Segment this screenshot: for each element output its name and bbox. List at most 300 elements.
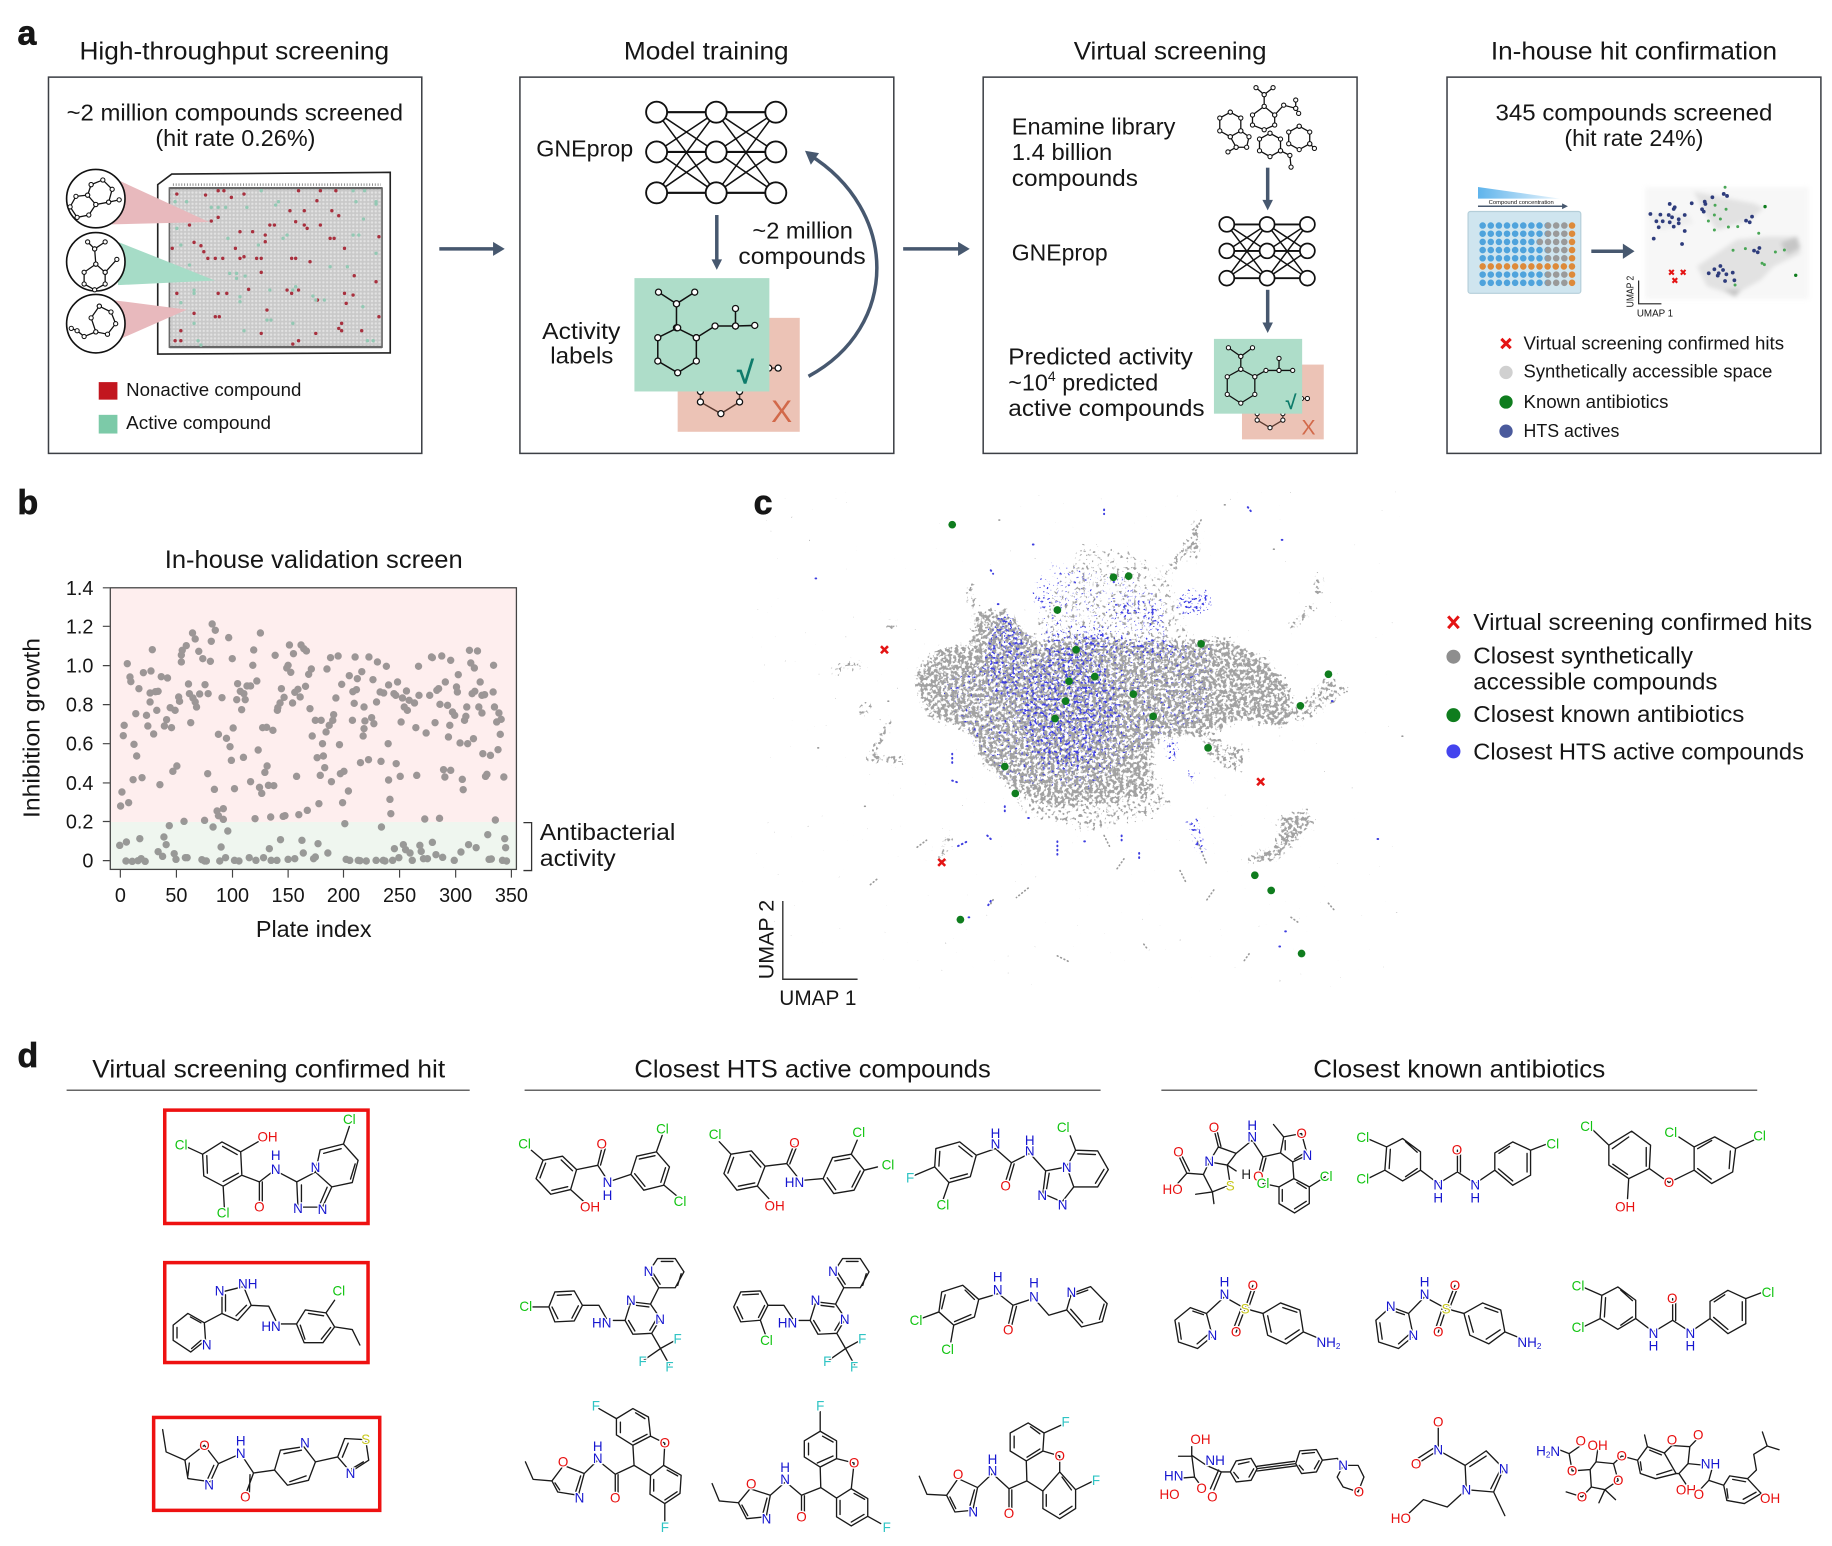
antibiotic 8: N <box>1461 1482 1471 1497</box>
hit box 1: Cl <box>217 1205 230 1220</box>
legend: Nonactive compound <box>126 379 301 400</box>
antibiotic 1: Cl <box>1320 1169 1332 1184</box>
molecule 6: Cl <box>910 1313 922 1328</box>
panel: model training <box>520 39 894 453</box>
y axis tick labels: 0.8 <box>66 695 93 717</box>
x axis title: Plate index <box>256 916 372 942</box>
UMAP axes <box>755 900 858 1010</box>
antibiotic 2: Cl <box>1356 1130 1369 1145</box>
antibiotic 4: NH <box>1316 1335 1336 1350</box>
antibiotic 8: HO <box>1391 1511 1411 1526</box>
molecule 3: Cl <box>1057 1120 1070 1135</box>
molecule 3: N <box>1025 1144 1035 1159</box>
panel: closest HTS active compounds <box>518 1056 1108 1535</box>
molecule 6: N <box>1029 1290 1039 1305</box>
blue HTS active compounds <box>816 507 1379 947</box>
molecule 3: H <box>1025 1133 1035 1148</box>
legend: Active compound <box>126 412 271 433</box>
legend: Synthetically accessible space <box>1524 361 1772 381</box>
hit box 3: N <box>300 1436 310 1451</box>
x axis tick labels <box>115 885 528 907</box>
hit box 2: HN <box>261 1319 281 1334</box>
antibiotic 5: O <box>1450 1278 1460 1293</box>
UMAP axes: UMAP 2 <box>755 900 778 979</box>
arrow down 2 <box>1262 290 1273 333</box>
x axis tick labels: 100 <box>216 885 249 907</box>
summary text: 345 compounds screened <box>1496 99 1772 125</box>
x axis tick labels: 250 <box>383 885 416 907</box>
antibiotic 7: O <box>1354 1485 1364 1500</box>
hit box 3: O <box>240 1489 251 1504</box>
molecule 8: O <box>746 1477 756 1492</box>
curved feedback arrow <box>805 151 877 376</box>
molecule 7: H <box>593 1439 603 1454</box>
molecule 2: O <box>789 1135 800 1150</box>
antibiotic 2 <box>1356 1130 1559 1205</box>
molecule 6: N <box>1067 1285 1076 1300</box>
antibiotic 9: NH <box>1701 1457 1720 1472</box>
text: predicted activity: 4 <box>1048 368 1056 384</box>
panel label a: a <box>18 14 38 52</box>
gray compound cloud <box>818 505 1404 962</box>
heading: in-house hit confirmation: In-house hit confirmation <box>1491 39 1777 66</box>
molecule 2: OH <box>765 1198 785 1213</box>
molecule 2: Cl <box>852 1125 865 1140</box>
hit box 2: Cl <box>332 1284 345 1299</box>
molecule 6: N <box>993 1283 1003 1298</box>
active card: √ <box>1286 392 1297 414</box>
hit box 1: N <box>271 1162 281 1177</box>
hit box 2: N <box>215 1284 225 1299</box>
antibiotic 9: O <box>1576 1433 1586 1448</box>
antibiotic 1: HO <box>1163 1182 1183 1197</box>
text: predicted activity: active compounds <box>1008 395 1205 421</box>
legend: Closest known antibiotics <box>1473 701 1744 727</box>
molecule 7: F <box>661 1520 669 1535</box>
molecule 9: F <box>1092 1473 1100 1488</box>
library molecules <box>1220 88 1314 167</box>
antibiotic 4: O <box>1248 1278 1258 1293</box>
molecule 3: N <box>1058 1197 1067 1212</box>
molecule 5: HN <box>778 1315 797 1330</box>
antibiotic 1: N <box>1303 1148 1312 1163</box>
text: predicted activity: Predicted activity <box>1008 344 1193 370</box>
text: Enamine library <box>1012 113 1176 191</box>
molecule 7 <box>525 1398 681 1535</box>
molecule 3: Cl <box>937 1197 949 1212</box>
antibiotic 7: NH <box>1205 1453 1225 1468</box>
molecule 5: N <box>828 1264 838 1279</box>
antibiotic 6: H <box>1686 1339 1695 1354</box>
arrow: screening to training <box>439 242 505 256</box>
small UMAP axes: UMAP 1 <box>1637 308 1673 320</box>
text: predicted activity: predicted <box>1056 369 1158 395</box>
molecule 4: HN <box>592 1315 611 1330</box>
antibiotic 1: O <box>1253 1169 1264 1184</box>
concentration gradient <box>1478 187 1568 209</box>
arrow: training to virtual screening <box>903 242 970 256</box>
legend: Virtual screening confirmed hits <box>1473 609 1812 635</box>
well plate <box>1468 212 1581 293</box>
antibiotic 1: Cl <box>1257 1176 1269 1191</box>
legend <box>99 379 301 434</box>
molecule 3: O <box>1000 1179 1011 1194</box>
molecule 5: F <box>823 1354 831 1369</box>
frame <box>983 77 1357 453</box>
antibiotic 3: O <box>1664 1175 1674 1190</box>
antibiotic 4: O <box>1231 1325 1241 1340</box>
legend: Virtual screening confirmed hits <box>1524 333 1784 353</box>
molecule 7: O <box>660 1436 670 1451</box>
molecule 8: N <box>762 1512 771 1527</box>
molecule 8: H <box>780 1460 790 1475</box>
text: predicted activity: ~10 <box>1008 369 1048 395</box>
heading: Virtual screening confirmed hit <box>92 1056 445 1083</box>
antibiotic 8: N <box>1433 1443 1443 1458</box>
label GNEprop: GNEprop <box>1012 240 1108 266</box>
molecule 4: N <box>626 1293 636 1308</box>
molecule 5: N <box>840 1312 850 1327</box>
inactive card: X <box>1302 417 1316 440</box>
hit box 3: N <box>236 1446 246 1461</box>
small UMAP axes <box>1624 276 1673 320</box>
antibiotic 6: Cl <box>1572 1278 1584 1293</box>
hit box 1 <box>165 1110 368 1223</box>
antibiotic 4 <box>1175 1274 1341 1351</box>
arrow to map <box>1591 244 1635 259</box>
hit box 2: N <box>202 1338 212 1353</box>
antibiotic 4: N <box>1208 1328 1217 1343</box>
text: predicted activity <box>1008 344 1205 421</box>
antibiotic 9: O <box>1567 1464 1577 1479</box>
y axis tick labels <box>66 578 93 873</box>
antibiotic 8: N <box>1499 1461 1509 1476</box>
antibiotic 9: OH <box>1760 1491 1780 1506</box>
text: 2 million compounds <box>738 217 866 269</box>
hit box 1: N <box>318 1202 327 1217</box>
y axis tick labels: 1.2 <box>66 616 93 638</box>
molecule 7: N <box>575 1491 584 1506</box>
text: Enamine library: Enamine library <box>1012 113 1176 139</box>
molecule 9 <box>919 1415 1100 1521</box>
molecule 3: N <box>1037 1188 1047 1203</box>
molecule 3: F <box>906 1170 914 1185</box>
molecule 9: O <box>953 1467 963 1482</box>
antibiotic 4: N <box>1220 1287 1229 1302</box>
molecule 5: F <box>850 1360 858 1375</box>
molecule 1: O <box>596 1137 607 1152</box>
panel: virtual screening <box>983 39 1357 453</box>
legend: accessible compounds <box>1473 668 1717 694</box>
frame <box>48 77 422 453</box>
text: 2 million compounds: compounds <box>738 243 866 269</box>
antibiotic 1: H <box>1241 1167 1251 1182</box>
molecule 2 <box>709 1125 894 1213</box>
antibiotic 8: O <box>1433 1415 1443 1430</box>
antibiotic 7: O <box>1196 1481 1207 1496</box>
molecule 9: N <box>988 1464 997 1479</box>
x axis tick labels: 350 <box>495 885 528 907</box>
legend: Closest HTS active compounds <box>1473 739 1804 765</box>
compound circle 3 <box>67 294 125 353</box>
antibiotic 9: O <box>1667 1433 1677 1448</box>
neural network <box>1219 217 1315 286</box>
antibiotic 7 <box>1159 1432 1364 1504</box>
small UMAP axes: UMAP 2 <box>1624 276 1636 307</box>
heading: virtual screening: Virtual screening <box>1074 39 1267 66</box>
molecule 3: N <box>991 1137 1000 1152</box>
heading: Closest HTS active compounds <box>634 1056 991 1083</box>
panel label c: c <box>754 484 772 522</box>
panel: scatter plot <box>19 547 675 942</box>
molecule 7: O <box>558 1454 568 1469</box>
hit box 3 <box>154 1417 380 1510</box>
summary text <box>67 99 403 151</box>
antibiotic 7: N <box>1338 1458 1348 1473</box>
molecule 4: Cl <box>519 1299 532 1314</box>
arrow down <box>712 215 722 270</box>
UMAP axes: UMAP 1 <box>779 987 856 1010</box>
active card: √ <box>737 354 755 390</box>
label GNEprop: GNEprop <box>536 136 633 162</box>
x axis tick labels: 50 <box>165 885 187 907</box>
antibiotic 6: Cl <box>1572 1320 1584 1335</box>
summary text: (hit rate 24%) <box>1564 125 1703 151</box>
molecule 8: O <box>796 1509 807 1524</box>
molecule 2: Cl <box>882 1158 894 1173</box>
molecule 1: H <box>603 1188 612 1203</box>
antibiotic 2: N <box>1470 1177 1480 1192</box>
bracket and label: Antibacterial <box>540 819 675 845</box>
antibiotic 9: O <box>1694 1487 1704 1502</box>
frame <box>1447 77 1821 453</box>
antibiotic 1: O <box>1296 1126 1307 1141</box>
molecule 9: O <box>1004 1506 1014 1521</box>
hit box 1: Cl <box>175 1138 187 1153</box>
data points <box>120 624 507 861</box>
compound circle 2 <box>67 233 125 291</box>
panel label d: d <box>18 1037 38 1075</box>
y axis tick labels: 0.4 <box>66 773 93 795</box>
hit box 1: N <box>293 1201 303 1216</box>
antibiotic 6: N <box>1686 1326 1695 1341</box>
bracket and label <box>523 819 675 871</box>
antibiotic 9: O <box>1616 1449 1627 1464</box>
hit box 3: H <box>236 1433 246 1448</box>
summary text: (hit rate 0.26%) <box>155 125 315 151</box>
molecule 8: F <box>883 1520 891 1535</box>
red confirmed hits <box>881 646 1264 866</box>
heading: high-throughput screening: High-throughput screening <box>79 39 389 66</box>
antibiotic 1: O <box>1209 1120 1219 1135</box>
molecule 2: Cl <box>709 1127 721 1142</box>
molecule 6 <box>910 1270 1107 1357</box>
y axis tick labels: 0.2 <box>66 812 93 834</box>
green known antibiotics <box>948 521 1332 957</box>
antibiotic 6: H <box>1649 1339 1658 1354</box>
hit box 1: OH <box>257 1130 278 1145</box>
molecule 7: N <box>593 1451 603 1466</box>
antibiotic 3: Cl <box>1753 1128 1766 1143</box>
antibiotic 2: Cl <box>1546 1137 1559 1152</box>
molecule 2: HN <box>785 1175 804 1190</box>
antibiotic 6: O <box>1667 1291 1677 1306</box>
antibiotic 4: 2 <box>1336 1342 1341 1351</box>
molecule 6: H <box>1029 1276 1039 1291</box>
molecule 4: F <box>665 1360 674 1375</box>
molecule 4: N <box>655 1312 665 1327</box>
text: activity labels: labels <box>550 342 613 368</box>
antibiotic 6: N <box>1649 1326 1658 1341</box>
molecule 1: N <box>603 1175 612 1190</box>
x axis tick labels: 300 <box>439 885 472 907</box>
x axis tick labels: 150 <box>272 885 305 907</box>
molecule 1: Cl <box>674 1194 686 1209</box>
inactive card: X <box>771 393 792 429</box>
hit box 2: NH <box>238 1277 257 1292</box>
hit box 1: Cl <box>343 1112 356 1127</box>
panel: in-house hit confirmation <box>1447 39 1821 453</box>
heading: In-house validation screen <box>165 547 463 574</box>
molecule 1: Cl <box>656 1121 669 1136</box>
molecule 5: F <box>858 1332 866 1347</box>
antibiotic 7: HO <box>1159 1487 1180 1502</box>
antibiotic 3: OH <box>1615 1200 1635 1215</box>
antibiotic 5: N <box>1420 1287 1429 1302</box>
hit box 1: N <box>311 1160 320 1175</box>
antibiotic 6: Cl <box>1762 1285 1774 1300</box>
antibiotic 3: Cl <box>1664 1125 1677 1140</box>
antibiotic 9: N <box>1550 1443 1560 1458</box>
antibiotic 5: H <box>1420 1274 1429 1289</box>
antibiotic 9: OH <box>1676 1482 1696 1497</box>
legend: Closest synthetically <box>1473 643 1693 669</box>
antibiotic 1: S <box>1226 1179 1235 1194</box>
molecule 1: Cl <box>518 1137 531 1152</box>
molecule 7: F <box>592 1398 600 1413</box>
y axis tick labels: 0.6 <box>66 734 93 756</box>
antibiotic 2: H <box>1433 1190 1443 1205</box>
text: Enamine library: compounds <box>1012 165 1138 191</box>
molecule 4: N <box>644 1264 653 1279</box>
molecule 4: F <box>639 1354 647 1369</box>
antibiotic 1: N <box>1247 1130 1257 1145</box>
text: 2 million compounds: ~2 million <box>752 217 853 243</box>
antibiotic 1: H <box>1247 1118 1257 1133</box>
panel: UMAP map <box>755 505 1812 1010</box>
molecule 8: F <box>816 1398 824 1413</box>
molecule 4 <box>519 1259 684 1375</box>
antibiotic 4: H <box>1220 1274 1229 1289</box>
hit box 3: O <box>199 1438 210 1453</box>
antibiotic 9: O <box>1693 1427 1703 1442</box>
active card <box>634 278 769 391</box>
molecule 8: O <box>849 1456 859 1471</box>
molecule 5 <box>734 1259 869 1375</box>
text: activity labels <box>542 318 621 368</box>
antibiotic 4: S <box>1241 1301 1250 1316</box>
molecule 5: Cl <box>760 1333 773 1348</box>
antibiotic 5: S <box>1442 1301 1451 1316</box>
active card <box>1214 339 1302 414</box>
antibiotic 2: Cl <box>1356 1172 1369 1187</box>
antibiotic 5 <box>1376 1274 1542 1351</box>
antibiotic 9: H <box>1536 1443 1546 1458</box>
hit box 3: N <box>346 1466 355 1481</box>
legend: Known antibiotics <box>1524 392 1668 412</box>
y axis title: Inhibition growth <box>19 638 45 818</box>
antibiotic 5: N <box>1409 1328 1418 1343</box>
hit box 1: O <box>254 1200 265 1215</box>
legend <box>1446 609 1812 765</box>
inactive card <box>1242 365 1324 440</box>
antibiotic 8 <box>1391 1415 1509 1526</box>
inactive card <box>678 318 800 432</box>
molecule 8: N <box>780 1472 790 1487</box>
small UMAP map <box>1645 187 1809 299</box>
neural network <box>646 102 786 203</box>
molecule 6: H <box>993 1270 1003 1285</box>
antibiotic 9: O <box>1577 1489 1587 1504</box>
panel: confirmed hits <box>67 1056 470 1510</box>
antibiotic 6 <box>1572 1278 1774 1354</box>
heading: model training: Model training <box>624 39 789 66</box>
molecule 1 <box>518 1121 686 1215</box>
antibiotic 5: NH <box>1517 1335 1537 1350</box>
antibiotic 1: O <box>1173 1145 1184 1160</box>
plot background <box>103 588 516 878</box>
arrow down 1 <box>1262 168 1273 210</box>
antibiotic 9: OH <box>1588 1438 1608 1453</box>
molecule 3 <box>906 1120 1108 1212</box>
molecule 8 <box>712 1398 891 1535</box>
antibiotic 7: HN <box>1164 1468 1183 1483</box>
hit box 3: N <box>204 1478 214 1493</box>
x axis tick labels: 200 <box>327 885 360 907</box>
text: activity labels: Activity <box>542 318 621 344</box>
antibiotic 7: OH <box>1190 1432 1211 1447</box>
legend <box>1499 333 1784 441</box>
antibiotic 2: O <box>1452 1142 1462 1157</box>
legend: HTS actives <box>1524 421 1619 441</box>
text: Enamine library: 1.4 billion <box>1012 139 1112 165</box>
antibiotic 9 <box>1536 1427 1780 1506</box>
molecule 6: Cl <box>941 1342 954 1357</box>
molecule 3: H <box>991 1126 1000 1141</box>
molecule 9: H <box>988 1452 997 1467</box>
summary text: ~2 million compounds screened <box>67 99 403 125</box>
summary text <box>1496 99 1772 151</box>
molecule 6: O <box>1003 1322 1014 1337</box>
antibiotic 3 <box>1580 1119 1766 1215</box>
concentration gradient: Compound concentration <box>1489 200 1554 206</box>
x axis tick labels: 0 <box>115 885 126 907</box>
antibiotic 1: N <box>1204 1154 1214 1169</box>
y axis tick labels: 1.4 <box>66 578 93 600</box>
y axis tick labels: 1.0 <box>66 656 93 678</box>
heading: Closest known antibiotics <box>1313 1056 1605 1083</box>
antibiotic 3: Cl <box>1580 1119 1593 1134</box>
compound circle 1 <box>67 169 125 228</box>
callout cones <box>112 181 215 339</box>
antibiotic 2: N <box>1433 1177 1443 1192</box>
hit box 2 <box>165 1263 368 1363</box>
antibiotic 5: 2 <box>1537 1342 1542 1351</box>
screening plate <box>158 172 390 354</box>
antibiotic 9: 2 <box>1546 1450 1551 1459</box>
frame <box>520 77 894 453</box>
antibiotic 1 <box>1163 1118 1332 1213</box>
